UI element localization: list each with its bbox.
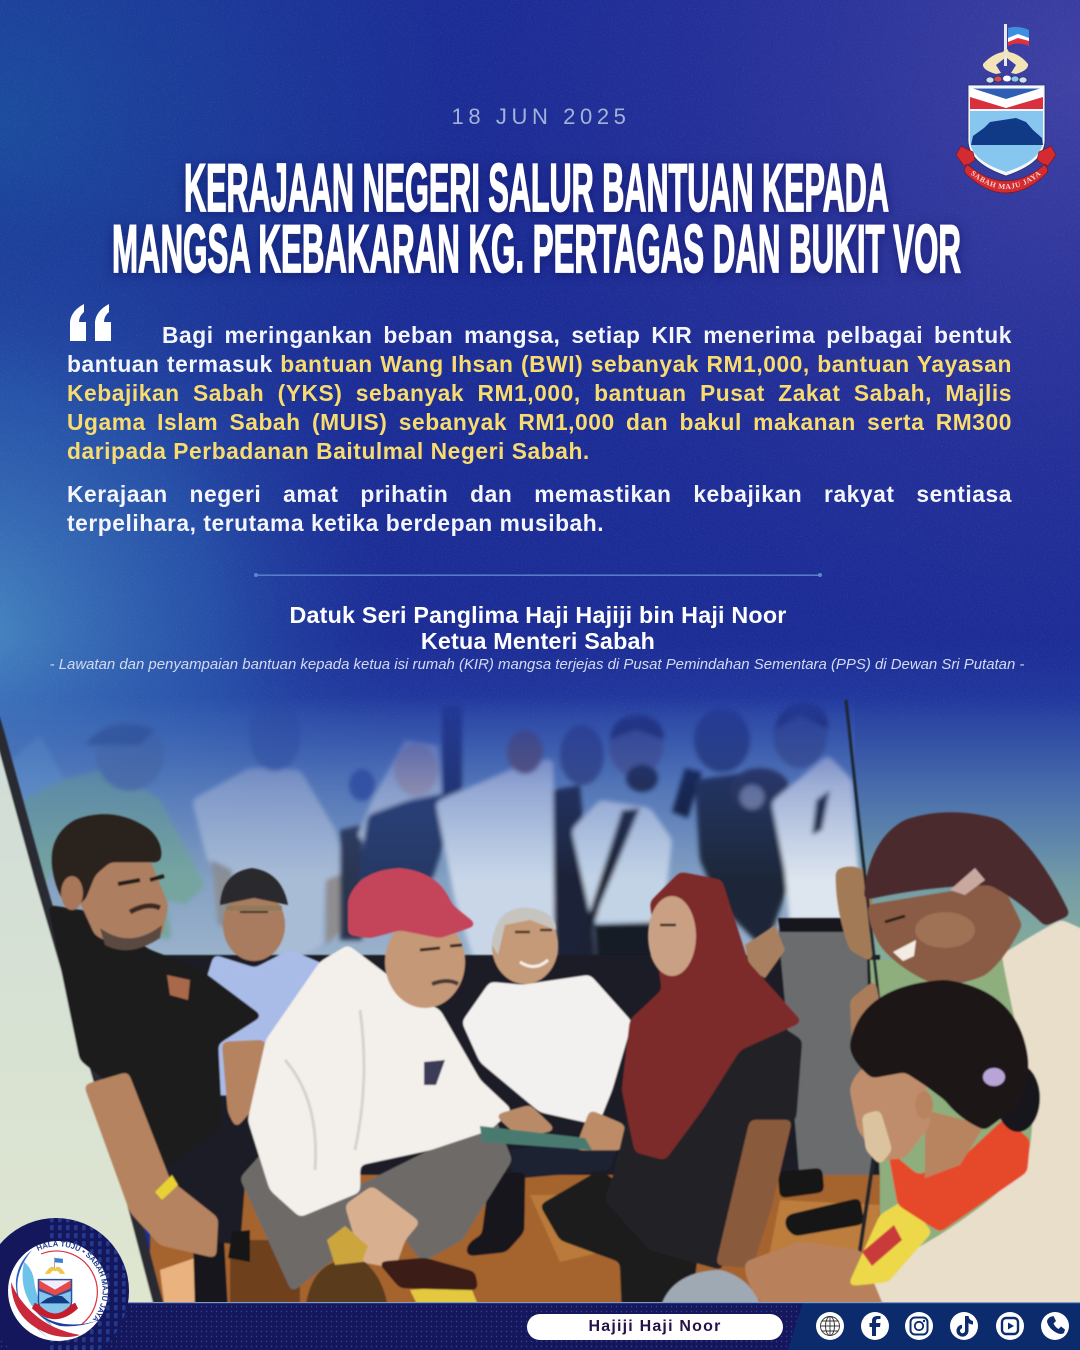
man with head wrap (850, 812, 1080, 1320)
right tent pole (846, 700, 880, 1010)
body paragraph one: Ugama Islam Sabah (MUIS) sebanyak RM1,000 dan bakul makanan serta RM300 (67, 409, 1012, 435)
body paragraph one: Bagi meringankan beban mangsa, setiap KIR menerima pelbagai bentuk (162, 322, 1012, 348)
woman in dark blazer (348, 739, 450, 880)
foreground people (0, 700, 1080, 1320)
left tent (0, 700, 160, 1310)
event caption: - Lawatan dan penyampaian bantuan kepada ketua isi rumah (KIR) mangsa terjejas di Pusat Pemindahan Sementara (PPS) di Dewan Sri Putatan - (50, 656, 1024, 673)
icon: tiktok (950, 1312, 978, 1340)
man in black shirt (48, 814, 266, 1262)
woman in maroon hijab (540, 872, 802, 1310)
icon: video play (996, 1312, 1024, 1340)
name pill (527, 1314, 783, 1340)
pillar and dark background (442, 705, 462, 795)
photo: crowd and aid recipients (0, 699, 1080, 1302)
badge logo: Hala Tuju Sabah Maju Jaya (0, 1218, 129, 1350)
oil bottle (305, 1226, 388, 1310)
cap man (188, 868, 325, 1095)
documents (480, 1126, 592, 1150)
icon: phone (1041, 1312, 1069, 1340)
man in light shirt (191, 736, 344, 954)
motto ribbon (956, 146, 1056, 194)
man with lanyard (772, 702, 862, 925)
body paragraph one (67, 322, 1012, 464)
faded backdrop and background crowd (4, 704, 1080, 961)
man in white shirt (436, 730, 556, 985)
main man in white shirt and red cap (240, 868, 556, 1292)
far-left man (14, 740, 60, 798)
shoes of standing man (778, 1168, 864, 1236)
wooden floor (150, 1175, 880, 1310)
box and bag (160, 1200, 228, 1310)
speaker name and role: Ketua Menteri Sabah (421, 628, 655, 654)
backing behind figures (150, 955, 880, 1180)
name pill: Hajiji Haji Noor (588, 1318, 722, 1335)
shield (968, 85, 1045, 176)
body paragraph two: terpelihara, terutama ketika berdepan musibah. (67, 510, 604, 536)
phone (672, 768, 702, 818)
wreath (986, 76, 1027, 83)
motto ribbon: SABAH MAJU JAYA (970, 170, 1041, 190)
icon: globe (816, 1312, 844, 1340)
speaker name and role: Datuk Seri Panglima Haji Hajiji bin Haji Noor (289, 602, 787, 628)
body paragraph two (67, 481, 1012, 536)
body paragraph one: bantuan termasuk bantuan Wang Ihsan (BWI) sebanyak RM1,000, bantuan Yayasan (67, 351, 1012, 377)
badge logo: Hala Tuju Sabah Maju Jaya: HALA TUJU • SABAH MAJU JAYA (36, 1241, 108, 1321)
tent edge (0, 718, 160, 1310)
flag (1004, 24, 1029, 66)
dark-clothed photographer (694, 708, 790, 950)
body paragraph two: Kerajaan negeri amat prihatin dan memastikan kebajikan rakyat sentiasa (67, 481, 1012, 507)
icon: facebook (861, 1312, 889, 1340)
hands (983, 47, 1028, 74)
body paragraph one: Kebajikan Sabah (YKS) sebanyak RM1,000, bantuan Pusat Zakat Sabah, Majlis (67, 380, 1012, 406)
date: 18 JUN 2025 (451, 104, 630, 129)
man in green shirt (15, 719, 205, 940)
standing trousers (778, 925, 872, 1210)
dark middle figures (550, 783, 599, 956)
photographer in blue shirt (568, 714, 674, 956)
speaker name and role (289, 602, 787, 654)
body paragraph one: daripada Perbadanan Baitulmal Negeri Sabah. (67, 438, 590, 464)
girl in red shirt (745, 980, 1040, 1310)
icon: instagram (905, 1312, 933, 1340)
small coat of arms (32, 1257, 78, 1319)
old man in white shirt (462, 908, 632, 1256)
